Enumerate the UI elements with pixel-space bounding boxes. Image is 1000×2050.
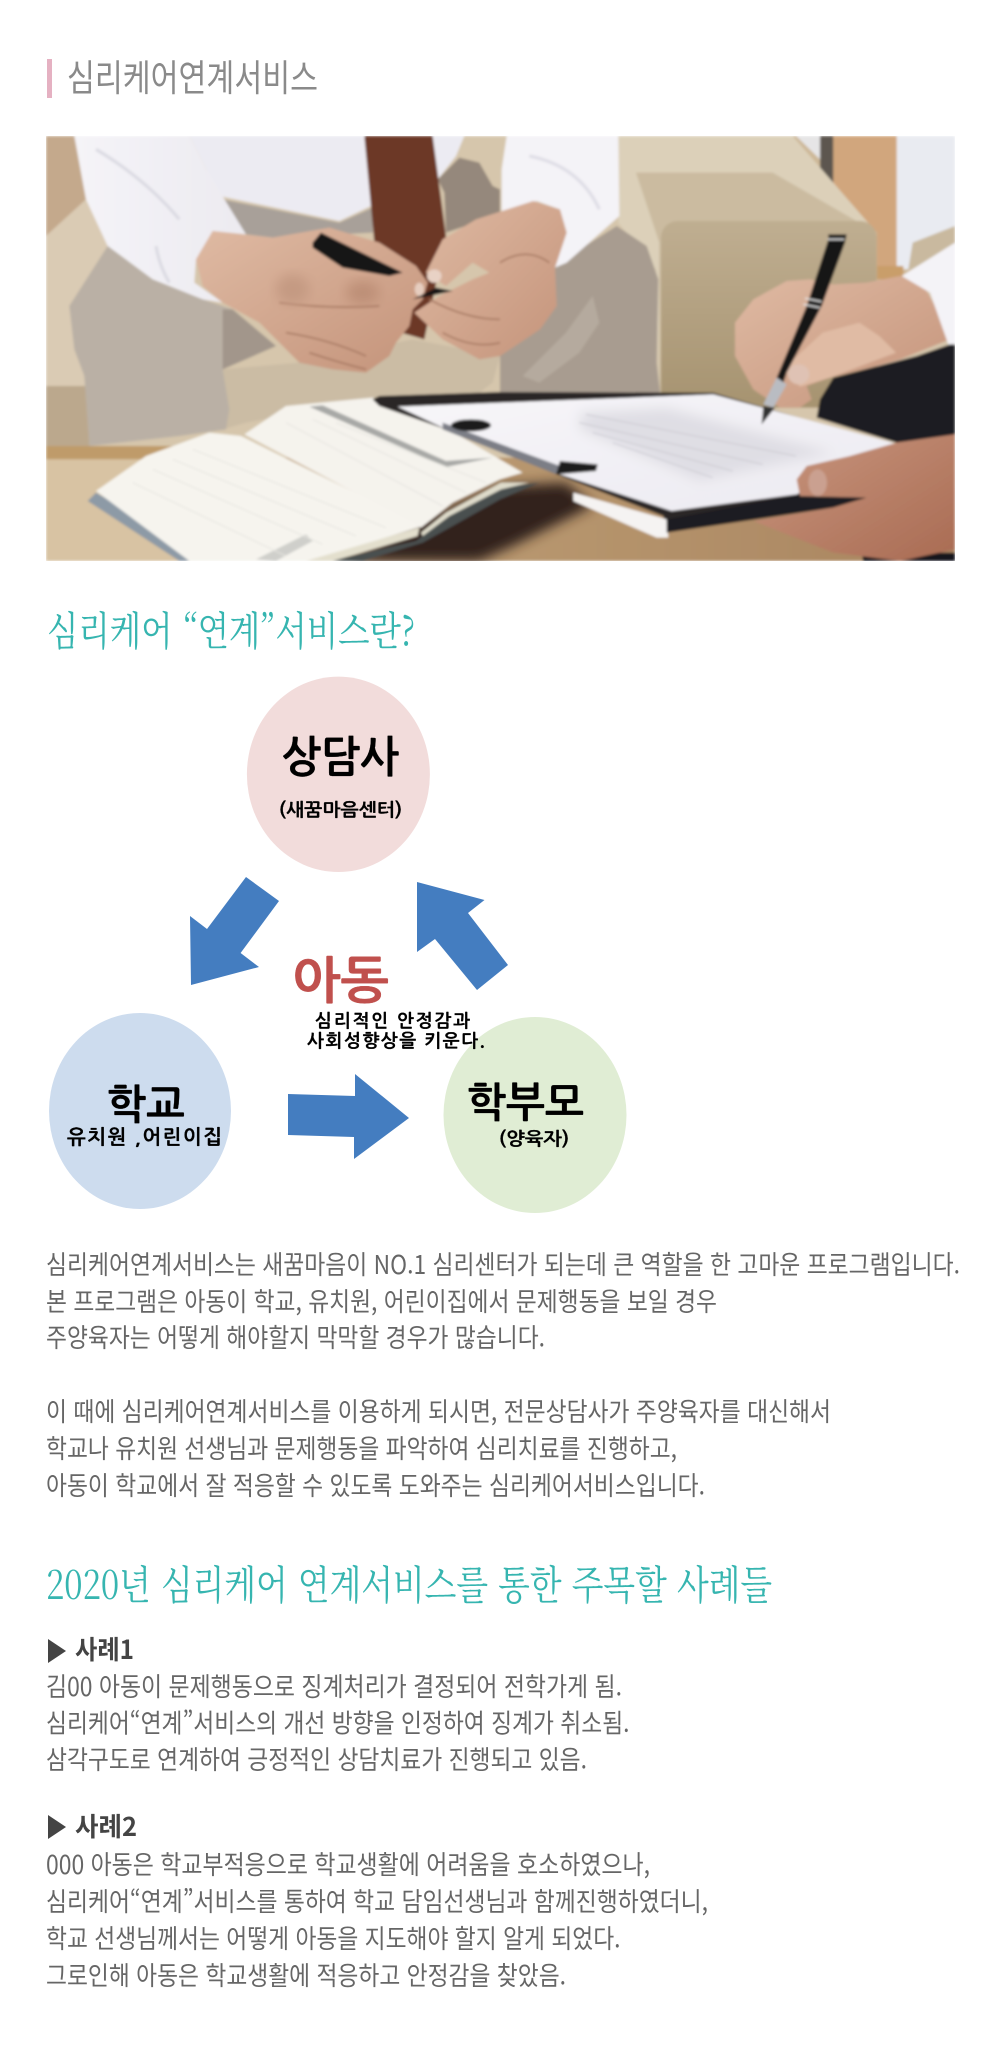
label: counselling centre: (새꿈마음센터)	[279, 800, 402, 819]
writing hand	[735, 276, 950, 408]
notebook	[88, 493, 206, 561]
case 1 text: 김00 아동이 문제행동으로 징계처리가 결정되어 전학가게 됨.	[46, 1667, 622, 1704]
case 2 heading: 사례2	[75, 1807, 137, 1844]
case 2 text	[46, 1845, 708, 1993]
case 1	[46, 1630, 630, 1777]
label: child: 아동	[292, 955, 389, 1006]
arrow: counsellor to school	[190, 877, 279, 985]
circle: parents	[444, 1017, 626, 1213]
bottom right hand	[753, 434, 955, 561]
waist	[223, 199, 373, 238]
left sleeve	[74, 136, 246, 303]
label: kindergarten, daycare: 유치원 ,어린이집	[67, 1127, 222, 1147]
text block: service description	[46, 1245, 960, 1503]
dark pants	[817, 343, 955, 443]
case 1 heading: 사례1	[75, 1630, 134, 1667]
arrow: parents to counsellor	[417, 882, 508, 990]
case 1 text	[46, 1667, 630, 1777]
circle: school	[49, 1013, 231, 1209]
text: child outcome: 심리적인 안정감과	[315, 1011, 470, 1030]
arrow: school to parents	[288, 1074, 409, 1159]
left sofa	[46, 136, 86, 236]
text block: service description: 주양육자는 어떻게 해야할지 막막할 경우가 많습니다.	[46, 1318, 545, 1355]
short pen	[313, 233, 403, 276]
heading: what is the care link service: 심리케어 “연계”서비스란?	[47, 600, 415, 657]
case 2 text: 심리케어“연계”서비스를 통하여 학교 담임선생님과 함께진행하였더니,	[46, 1882, 708, 1919]
case 1 heading	[48, 1630, 134, 1667]
text block: service description: 학교나 유치원 선생님과 문제행동을 파악하여 심리치료를 진행하고,	[46, 1429, 677, 1466]
tie	[364, 136, 446, 339]
case 1 text: 심리케어“연계”서비스의 개선 방향을 인정하여 징계가 취소됨.	[46, 1704, 630, 1740]
text block: service description: 아동이 학교에서 잘 적응할 수 있도록 도와주는 심리케어서비스입니다.	[46, 1466, 705, 1503]
table	[46, 458, 955, 561]
right sleeve	[502, 136, 619, 268]
text block: service description: 이 때에 심리케어연계서비스를 이용하게 되시면, 전문상담사가 주양육자를 대신해서	[46, 1392, 831, 1429]
heading: notable cases 2020: 2020년 심리케어 연계서비스를 통한 주목할 사례들	[46, 1554, 772, 1611]
case 2 text: 학교 선생님께서는 어떻게 아동을 지도해야 할지 알게 되었다.	[46, 1919, 620, 1956]
circle: counsellor	[247, 677, 430, 872]
diagram: care triangle	[49, 677, 626, 1213]
case 2 text: 000 아동은 학교부적응으로 학교생활에 어려움을 호소하였으나,	[46, 1845, 650, 1882]
right background	[793, 136, 955, 283]
right leg	[500, 226, 660, 396]
photo: counselling session with clipboard and notebook	[46, 136, 955, 561]
writing pen	[777, 234, 847, 383]
shirt	[189, 136, 371, 221]
clipboard	[373, 392, 897, 533]
right fingers	[414, 201, 567, 359]
label: counsellor: 상담사	[282, 735, 400, 779]
case 2 heading	[48, 1807, 137, 1844]
left pants	[69, 246, 276, 446]
diagram: care triangle: 사회성향상을 키운다.	[307, 1031, 485, 1050]
case 1 text: 삼각구도로 연계하여 긍정적인 상담치료가 진행되고 있음.	[46, 1740, 587, 1777]
text block: service description: 본 프로그램은 아동이 학교, 유치원, 어린이집에서 문제행동을 보일 경우	[46, 1282, 717, 1319]
left hand	[196, 228, 428, 373]
label: guardian: (양육자)	[499, 1129, 569, 1148]
case 2	[46, 1807, 708, 1993]
right sofa arm	[618, 136, 877, 403]
case 2 text: 그로인해 아동은 학교생활에 적응하고 안정감을 찾았음.	[46, 1956, 566, 1993]
label: parents: 학부모	[467, 1082, 584, 1124]
page title: 심리케어연계서비스	[67, 48, 318, 102]
label: school: 학교	[107, 1084, 185, 1126]
